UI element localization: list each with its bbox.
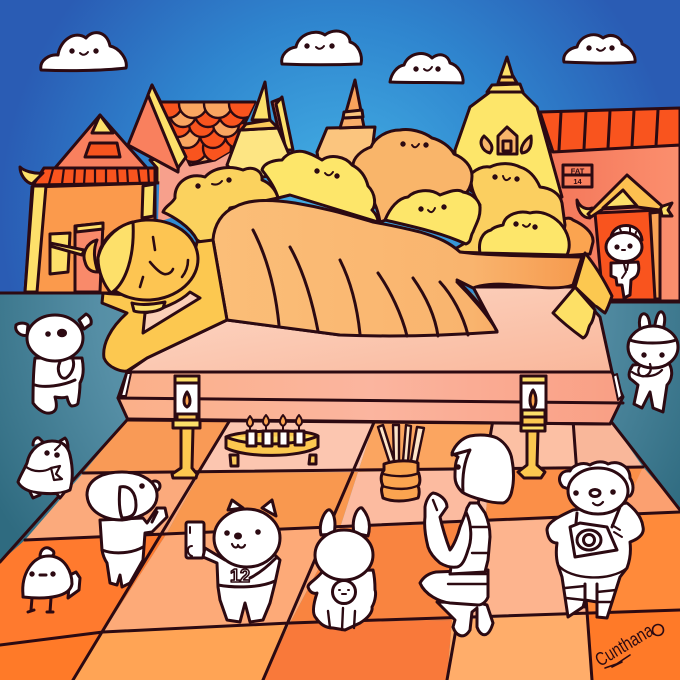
cat character with phone [186, 500, 280, 622]
wall sign [563, 165, 592, 187]
floor tiles [0, 420, 680, 680]
orange bush behind foot [560, 218, 593, 256]
hair [452, 435, 514, 503]
large golden stupa [455, 57, 562, 210]
robe [213, 200, 582, 336]
peach stupa centre [317, 80, 375, 175]
wall sign: 14 [573, 177, 582, 186]
pink cloth [143, 292, 200, 333]
monk figure in shrine [606, 226, 642, 298]
hair knot [84, 240, 98, 272]
shirt number: 12 [230, 566, 250, 586]
platform base [118, 372, 623, 424]
skirt [420, 570, 488, 605]
temple wall and red roof band, right [540, 108, 680, 302]
elephant character from behind [87, 472, 167, 587]
left candle holder [172, 376, 200, 478]
ears [559, 462, 633, 500]
cloud 1 [41, 33, 126, 71]
legs and feet [437, 602, 493, 636]
wall sign: FAT [571, 166, 585, 176]
mattress [127, 287, 612, 372]
right candle holder [518, 376, 546, 478]
bush D, light yellow [385, 190, 480, 244]
horizon lines [0, 293, 680, 301]
girl character kneeling [420, 435, 514, 636]
artist signature: Cunthana [592, 620, 658, 671]
head [96, 217, 200, 303]
cloud 4 [564, 35, 635, 63]
bush F, light yellow [479, 212, 569, 255]
topknot spike [50, 243, 84, 255]
bush C, peach [353, 129, 472, 222]
rabbit character from behind with backpack [308, 508, 376, 630]
backpack [332, 580, 356, 604]
bush B, light yellow [262, 151, 378, 222]
cloud 2 [282, 31, 361, 65]
robe folds [253, 230, 497, 336]
yellow stupa left [227, 82, 300, 180]
facial features [140, 237, 188, 287]
reclining Buddha [50, 200, 612, 371]
praying arm [425, 493, 471, 567]
stupa ornament [481, 127, 531, 154]
small shrine, right [577, 175, 672, 300]
koala character with camera [547, 462, 643, 618]
hamster character [18, 438, 72, 498]
bush A, golden [163, 168, 278, 243]
candle offering tray [226, 415, 318, 466]
chick character [23, 548, 80, 612]
rabbit character, headband [628, 312, 678, 412]
bear character, praying [16, 314, 91, 413]
phone [186, 522, 204, 558]
sky background [0, 0, 680, 300]
bush E, gold [450, 164, 565, 255]
gold arm and shoulder [102, 240, 227, 371]
cloud 3 [390, 54, 463, 83]
ground background [0, 293, 680, 680]
tiled temple roof, centre-left [128, 85, 257, 222]
collar [132, 302, 165, 312]
torso [450, 503, 490, 574]
incense pot [378, 425, 424, 501]
left house [20, 115, 173, 293]
feet cloth [575, 253, 612, 313]
floor grid lines [0, 420, 680, 680]
camera [570, 523, 622, 557]
head crown [98, 222, 133, 293]
